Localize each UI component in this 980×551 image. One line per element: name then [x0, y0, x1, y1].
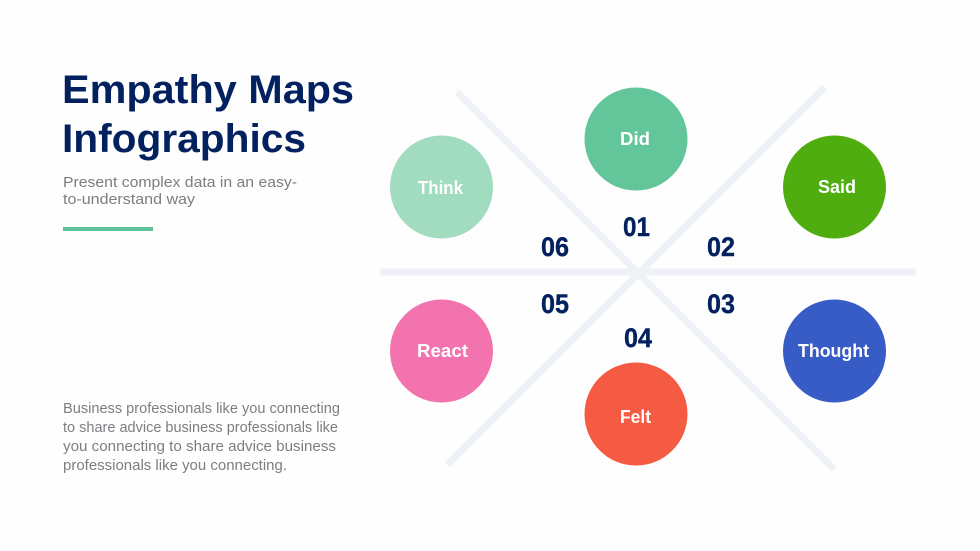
number 06: 06: [541, 232, 569, 262]
subtitle: to-understand way: [63, 191, 196, 208]
node 06: Think: [390, 136, 493, 238]
number 03: 03: [707, 289, 735, 319]
node 05: React: React: [417, 340, 468, 361]
node 04: Felt: [584, 362, 688, 466]
title: Infographics: [62, 117, 306, 161]
number 04: 04: [624, 323, 652, 353]
subtitle: [63, 174, 297, 208]
node 03: Thought: [783, 300, 886, 402]
title: [62, 68, 354, 161]
node 04: Felt: Felt: [620, 406, 651, 427]
node 06: Think: Think: [418, 177, 464, 198]
body text: you connecting to share advice business: [63, 438, 336, 455]
node 02: Said: [783, 136, 886, 238]
number 01: 01: [623, 212, 650, 242]
node 02: Said: Said: [818, 176, 856, 197]
node 01: Did: Did: [620, 128, 650, 149]
accent rule: [63, 227, 153, 231]
title: Empathy Maps: [62, 68, 354, 112]
body text: Business professionals like you connecting: [63, 400, 340, 417]
divider lines: [380, 87, 916, 469]
number 02: 02: [707, 232, 735, 262]
node 03: Thought: Thought: [798, 340, 869, 361]
number 05: 05: [541, 289, 569, 319]
body text: professionals like you connecting.: [63, 457, 287, 474]
body text: to share advice business professionals like: [63, 419, 338, 436]
node 05: React: [390, 300, 493, 402]
node 01: Did: [584, 88, 688, 190]
body text: [63, 400, 340, 474]
subtitle: Present complex data in an easy-: [63, 174, 297, 191]
